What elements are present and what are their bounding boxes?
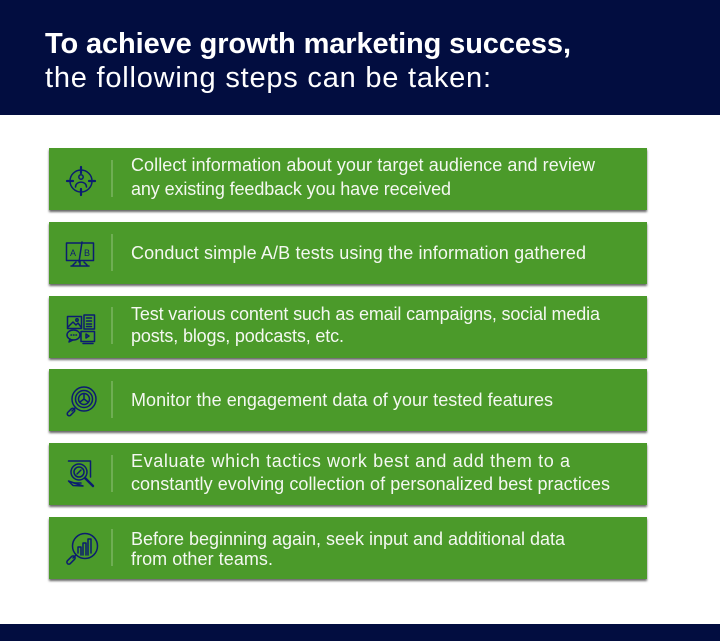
title: To achieve growth marketing success, (45, 28, 571, 60)
step 1: collect information: any existing feedback you have received (131, 179, 451, 199)
step 5: evaluate tactics: Evaluate which tactics work best and add them to a (131, 451, 571, 471)
step 2: A/B tests (49, 222, 647, 286)
step 4: monitor engagement (49, 369, 647, 433)
step 6: seek input: from other teams. (131, 549, 273, 569)
icon: A/B screen (66, 242, 94, 266)
icon: document with magnifier (68, 461, 93, 486)
step 1: collect information (49, 148, 647, 212)
step 3: test content: Test various content such as email campaigns, social media (131, 304, 601, 324)
step 6: seek input: Before beginning again, seek input and additional data (131, 529, 566, 549)
step 3: test content: posts, blogs, podcasts, etc. (131, 326, 344, 346)
footer band (0, 624, 720, 641)
step 1: collect information: Collect information about your target audience and review (131, 155, 596, 175)
step 4: monitor engagement: Monitor the engagement data of your tested features (131, 390, 553, 410)
icon: A/B screen: A (70, 248, 76, 258)
step 5: evaluate tactics (49, 443, 647, 507)
icon: content types (67, 315, 94, 344)
title: the following steps can be taken: (45, 62, 491, 94)
step 3: test content (49, 296, 647, 360)
step 5: evaluate tactics: constantly evolving collection of personalized best practices (131, 474, 610, 494)
title (45, 28, 571, 94)
step 6: seek input (49, 517, 647, 581)
step 2: A/B tests: Conduct simple A/B tests using the information gathered (131, 243, 586, 263)
icon: magnifier with bars (66, 534, 98, 565)
icon: audience target (67, 167, 95, 195)
icon: A/B screen: B (84, 248, 90, 258)
header band (0, 0, 720, 115)
icon: magnifier with pie chart (66, 387, 96, 417)
